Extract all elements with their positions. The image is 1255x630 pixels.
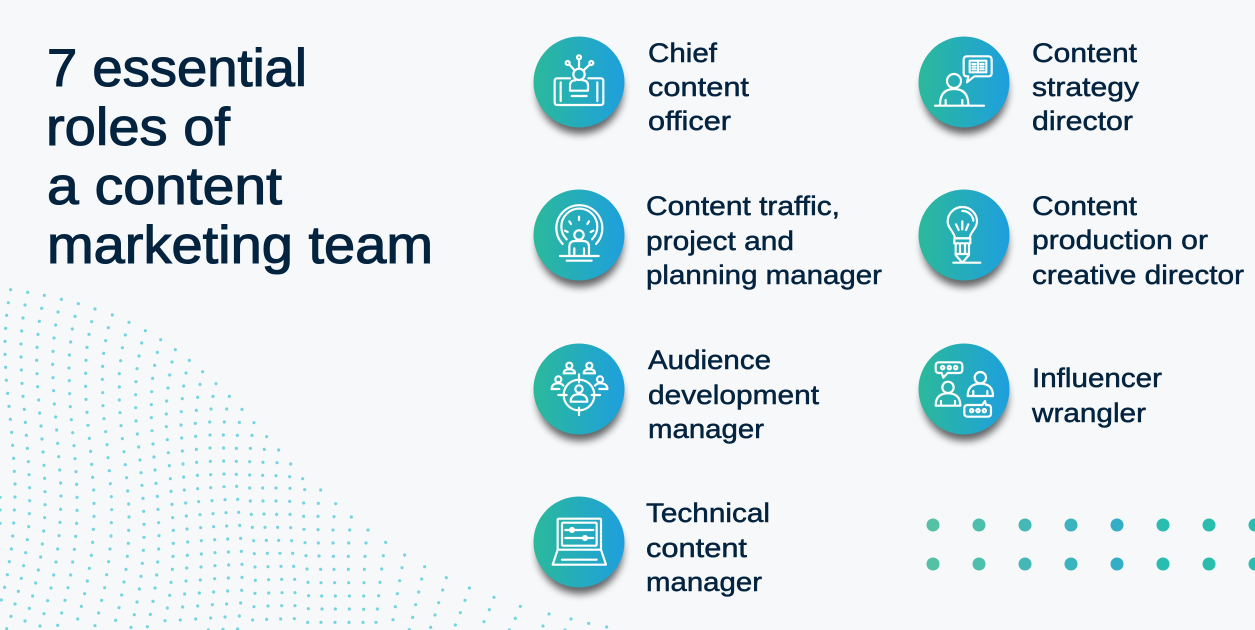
role: content production or creative director	[918, 190, 1244, 290]
icon: content strategy director	[918, 36, 1010, 134]
label: planning manager	[646, 260, 882, 290]
label	[1032, 38, 1140, 136]
label: Content	[1032, 191, 1138, 221]
icon: lightbulb pencil	[918, 190, 1010, 287]
label: development	[648, 380, 820, 410]
label: creative director	[1032, 260, 1244, 290]
title: 7 essential	[47, 39, 307, 98]
icon: laptop with sliders	[534, 496, 624, 594]
label: production or	[1032, 225, 1208, 255]
icon: chief content officer	[534, 36, 624, 134]
title	[46, 39, 433, 275]
label: strategy	[1032, 72, 1140, 102]
icon: audience target	[534, 344, 624, 441]
label: manager	[646, 567, 762, 597]
label	[646, 191, 882, 290]
role: content strategy director	[918, 36, 1140, 136]
label: Chief	[648, 38, 718, 68]
role: audience development manager	[534, 344, 820, 444]
label: officer	[648, 106, 731, 136]
label	[1031, 363, 1162, 428]
icon: influencers chatting	[918, 344, 1010, 441]
label: Technical	[646, 498, 770, 528]
label: director	[1032, 106, 1133, 136]
icon: traffic and planning	[534, 190, 624, 287]
label	[648, 38, 750, 136]
title: marketing team	[47, 216, 433, 275]
label: content	[648, 72, 750, 102]
decorative dot grid	[926, 518, 1255, 570]
role: technical content manager	[534, 496, 770, 597]
label: project and	[646, 226, 794, 256]
label: Content	[1032, 38, 1138, 68]
label	[1032, 191, 1244, 290]
label	[648, 345, 820, 444]
title: a content	[47, 157, 282, 216]
halftone dot wave	[0, 290, 607, 630]
label	[646, 498, 770, 597]
role: influencer wrangler	[918, 344, 1162, 441]
role: content traffic, project and planning manager	[534, 190, 882, 290]
label: content	[646, 533, 748, 563]
label: wrangler	[1031, 398, 1146, 428]
label: Content traffic,	[646, 191, 840, 221]
label: manager	[648, 414, 764, 444]
title: roles of	[46, 98, 230, 157]
role: chief content officer	[534, 36, 750, 136]
label: Influencer	[1032, 363, 1162, 393]
label: Audience	[648, 345, 771, 375]
